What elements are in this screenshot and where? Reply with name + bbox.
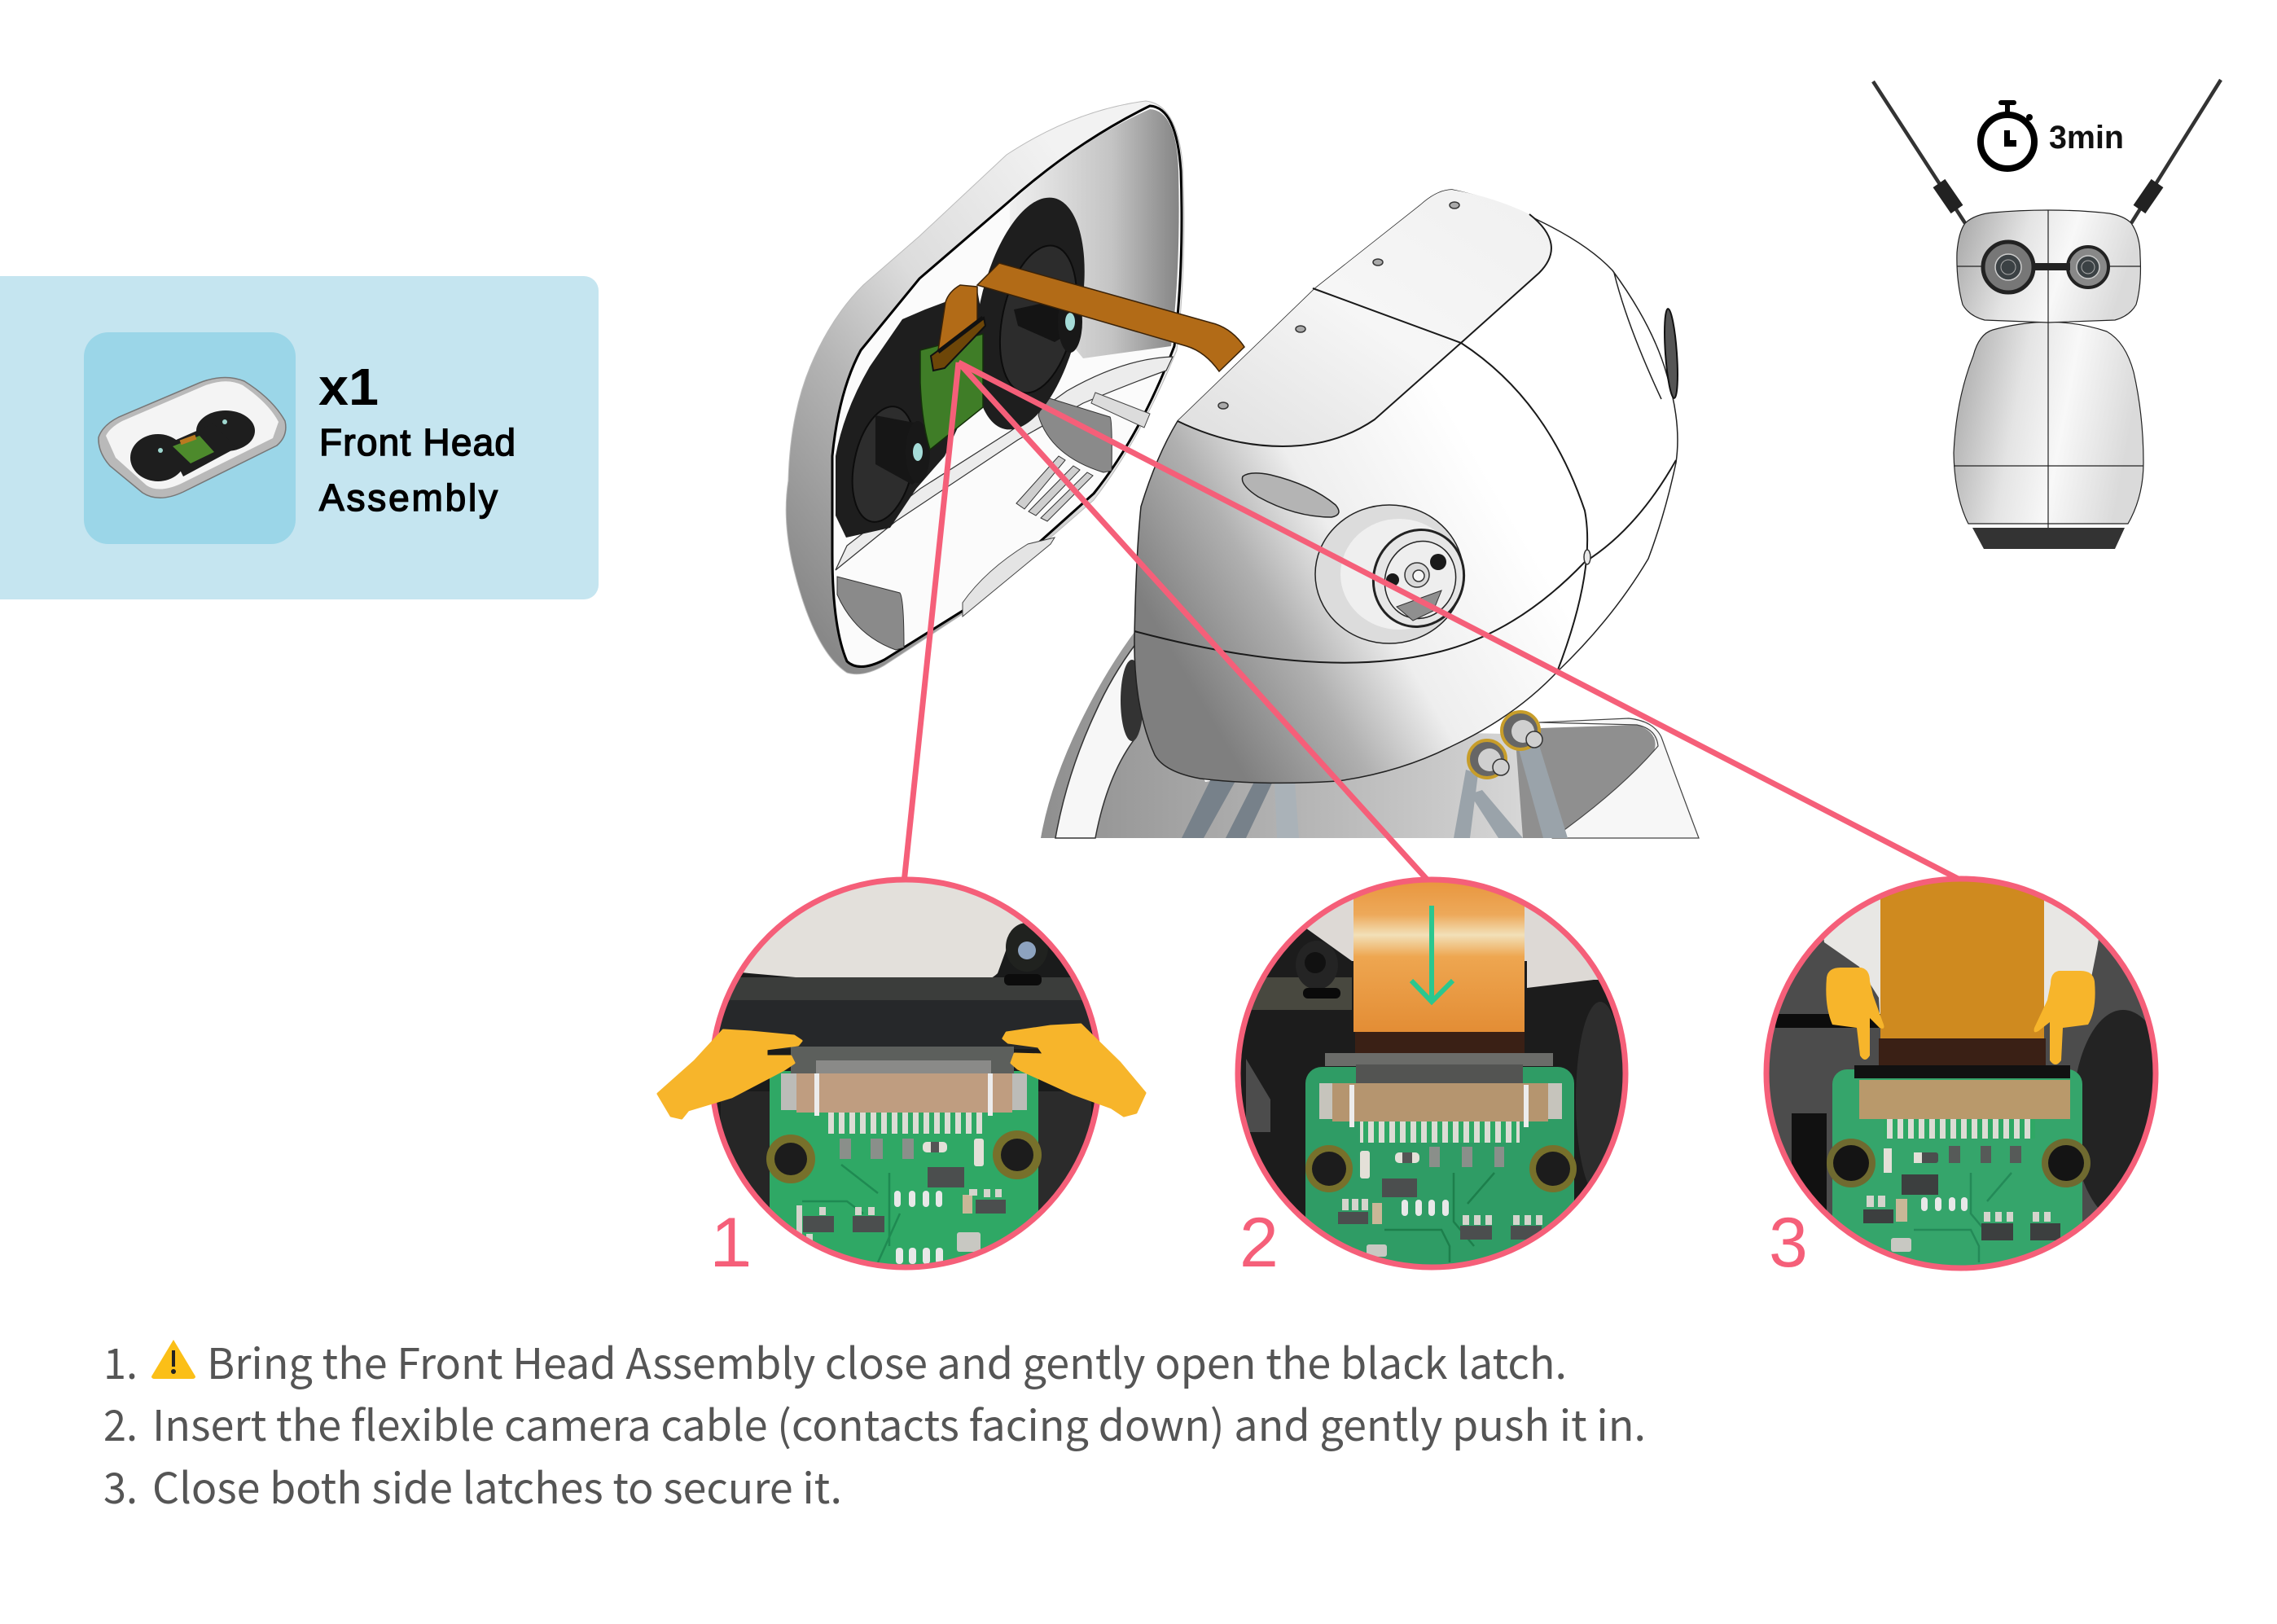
step 2 text: Insert the flexible camera cable (contacts facing down) and gently push it in.	[152, 1392, 1646, 1453]
icon: left pinching hand	[658, 1030, 801, 1118]
head shell	[1134, 190, 1678, 783]
step 1 text: Bring the Front Head Assembly close and gently open the black latch.	[207, 1330, 1567, 1391]
screw holes	[1218, 202, 1590, 564]
icon: left pointing hand	[1826, 968, 1884, 1060]
photo circle 3	[1763, 876, 2174, 1281]
photo circle 2	[1234, 876, 1633, 1279]
far side port	[1614, 273, 1680, 399]
seams	[1954, 210, 2143, 528]
photo circle 1	[658, 876, 1145, 1275]
shell back wall	[1010, 109, 1179, 358]
shoulder screws	[1468, 712, 1542, 778]
antennas	[1873, 80, 2221, 223]
base	[1972, 528, 2125, 549]
right lens module	[955, 187, 1103, 440]
right eye	[2068, 247, 2108, 287]
connector latch	[931, 318, 985, 371]
latch tabs	[837, 397, 1112, 650]
back plate seams	[1134, 214, 1676, 672]
eye bridge	[2034, 263, 2070, 270]
camera board	[920, 334, 983, 450]
vent slot	[1242, 473, 1339, 517]
step 3 text: Close both side latches to secure it.	[152, 1455, 842, 1516]
step number 2: 2	[1239, 1204, 1279, 1282]
icon: warning triangle	[151, 1340, 195, 1379]
body	[1954, 322, 2143, 524]
step 1 number: 1.	[103, 1330, 138, 1391]
icon: stopwatch	[1981, 100, 2034, 169]
left lens module	[836, 290, 989, 538]
vent slots	[1016, 456, 1093, 521]
left eye	[1983, 242, 2034, 292]
instructions	[103, 1330, 1646, 1516]
shell outer casing	[786, 101, 1184, 674]
ribbon cable	[938, 263, 1244, 371]
panel: parts list	[0, 276, 599, 599]
timer label: 3min	[2049, 120, 2124, 156]
callout lines	[904, 362, 1966, 883]
lower rim	[836, 357, 1173, 570]
step 3 number: 3.	[103, 1455, 138, 1516]
icon: right pinching hand	[1003, 1025, 1145, 1116]
robot base behind head	[1041, 629, 1699, 838]
front head shell	[786, 101, 1244, 674]
part quantity: x1	[318, 358, 379, 416]
standoff post	[1091, 393, 1150, 428]
part name: Front Head	[319, 421, 516, 463]
icon: right pointing hand	[2034, 971, 2095, 1064]
top plate	[1178, 190, 1551, 446]
step 2 number: 2.	[103, 1392, 138, 1453]
robot thumbnail	[1873, 80, 2221, 549]
robot head	[1134, 190, 1680, 783]
timer	[1981, 100, 2124, 169]
slide rail	[963, 538, 1055, 617]
ear socket	[1315, 505, 1477, 643]
step number 1: 1	[711, 1204, 750, 1282]
step number 3: 3	[1769, 1204, 1808, 1282]
part thumbnail tile	[84, 332, 296, 544]
head	[1957, 210, 2140, 323]
icon: green push arrow	[1411, 906, 1453, 1002]
shell interior	[832, 106, 1182, 667]
part name: Assembly	[319, 476, 498, 519]
